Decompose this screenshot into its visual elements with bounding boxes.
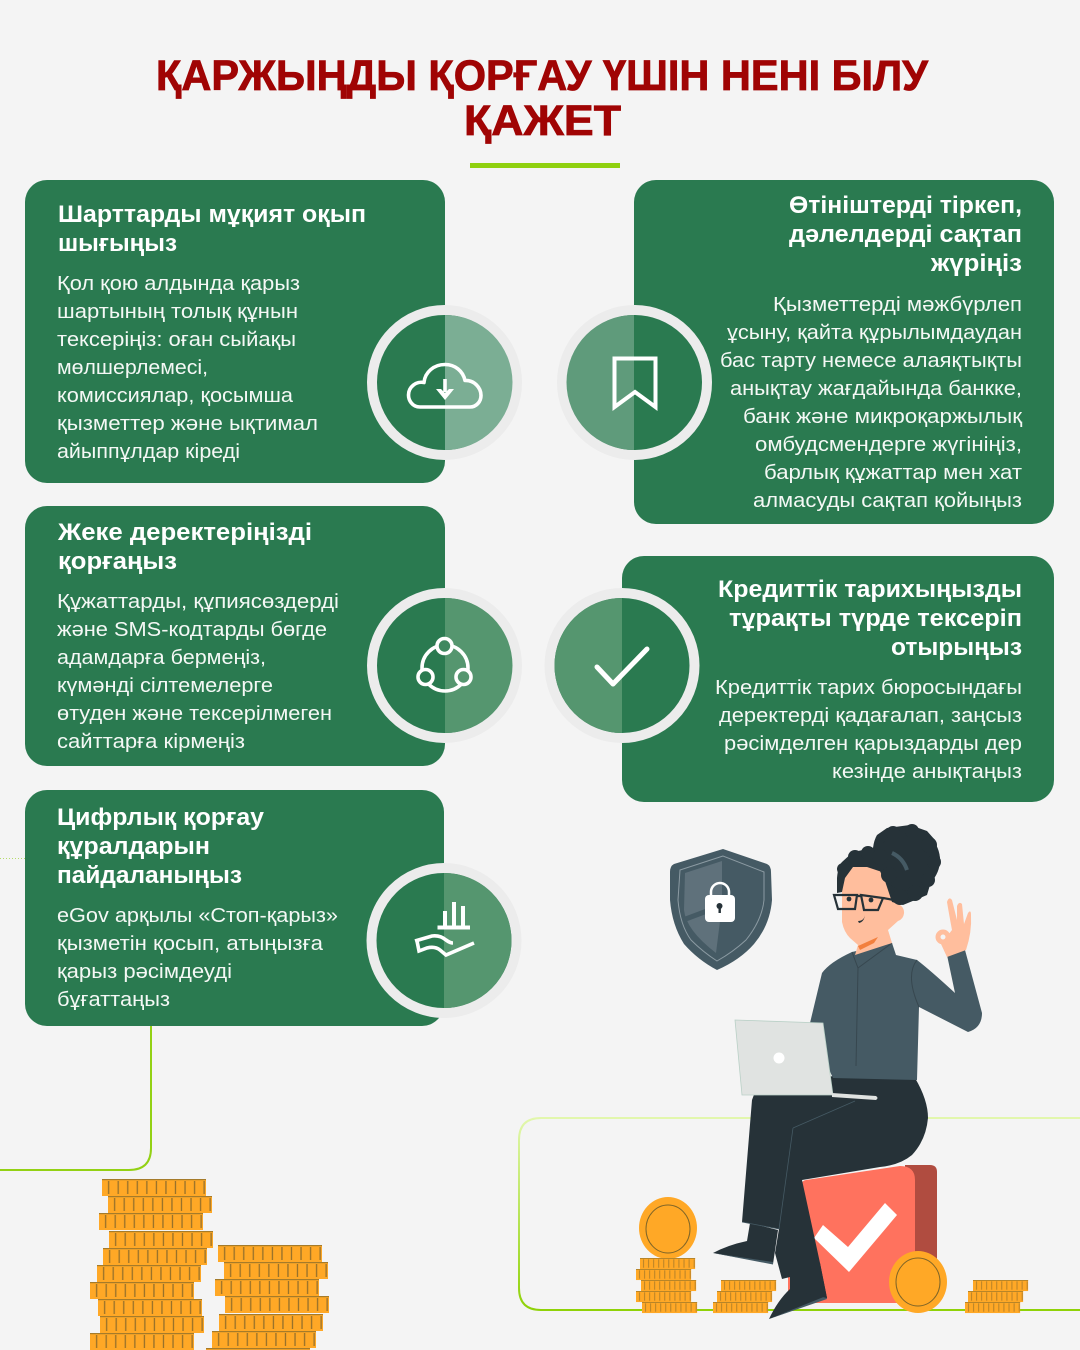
woman with laptop: [713, 824, 982, 1319]
shield with padlock: [670, 849, 772, 970]
body text: digital protection tools: [57, 905, 338, 1011]
body text: read the terms: шартының толық құнын: [57, 301, 298, 323]
eyes: [847, 897, 873, 902]
heading: read the terms: шығыңыз: [58, 230, 177, 257]
body text: protect personal data: сайттарға кірмеңіз: [57, 731, 245, 753]
glasses: [834, 895, 894, 910]
body text: read the terms: тексеріңіз: оған сыйақы: [57, 329, 296, 351]
body text: protect personal data: [57, 591, 339, 753]
body text: keep evidence: анықтау жағдайында банкке,: [730, 378, 1022, 400]
body text: keep evidence: барлық құжаттар мен хат: [764, 462, 1022, 484]
coin stack: left short: [206, 1245, 329, 1350]
body text: protect personal data: және SMS-кодтарды бөгде: [57, 619, 327, 641]
heading: digital protection tools: Цифрлық қорғау: [57, 804, 265, 831]
title: [156, 52, 929, 145]
red box with check mark: [788, 1165, 937, 1303]
icon badge: check mark: [550, 593, 694, 738]
body text: keep evidence: Қызметтерді мәжбүрлеп: [773, 294, 1022, 316]
heading: digital protection tools: [57, 804, 265, 889]
heading: read the terms: Шарттарды мұқият оқып: [58, 201, 366, 228]
icon badge: cloud download: [372, 310, 517, 455]
frame line: right: [519, 1118, 1080, 1310]
body text: check credit history: рәсімделген қарыздарды дер: [724, 733, 1022, 755]
coin stack: small B: [713, 1280, 776, 1313]
body text: keep evidence: [720, 294, 1022, 512]
title: ҚАРЖЫҢДЫ ҚОРҒАУ ҮШІН НЕНІ БІЛУ: [156, 52, 929, 100]
body text: keep evidence: омбудсмендерге жүгініңіз,: [755, 434, 1022, 456]
body text: protect personal data: Құжаттарды, құпиясөздерді: [57, 591, 339, 613]
heading: protect personal data: [57, 519, 312, 575]
curly hair: [837, 824, 941, 905]
hand ok sign: [938, 898, 971, 957]
body text: check credit history: Кредиттік тарих бюросындағы: [715, 677, 1022, 699]
shoes: [713, 1223, 827, 1319]
body text: protect personal data: күмәнді сілтемелерге: [57, 675, 273, 697]
body text: keep evidence: алмасуды сақтап қойыңыз: [753, 490, 1022, 512]
body text: read the terms: мөлшерлемесі,: [57, 357, 208, 379]
panel: check credit history: [550, 556, 1054, 802]
laptop: [735, 1020, 878, 1100]
body text: read the terms: Қол қою алдында қарыз: [57, 273, 300, 295]
body text: check credit history: кезінде анықтаңыз: [832, 761, 1022, 783]
connector line: left: [0, 1026, 151, 1170]
panel: protect personal data: [25, 506, 517, 766]
coin: large right: [889, 1251, 947, 1313]
heading: keep evidence: Өтініштерді тіркеп,: [789, 192, 1022, 219]
heading: keep evidence: жүріңіз: [930, 250, 1022, 277]
heading: digital protection tools: пайдаланыңыз: [57, 862, 242, 889]
mouth: [858, 915, 865, 923]
coin stack: small C: [965, 1280, 1028, 1313]
body text: read the terms: [57, 273, 318, 463]
panel: keep evidence: [562, 180, 1054, 524]
icon badge: network: [372, 593, 517, 738]
body text: read the terms: айыппұлдар кіреді: [57, 441, 240, 463]
icon badge: bookmark: [562, 310, 707, 455]
heading: digital protection tools: құралдарын: [57, 833, 210, 860]
body text: keep evidence: ұсыну, қайта құрылымдаудан: [727, 322, 1022, 344]
body text: keep evidence: банк және микроқаржылық: [743, 406, 1022, 428]
body text: check credit history: [715, 677, 1022, 783]
body text: keep evidence: бас тарту немесе алаяқтықты: [720, 350, 1022, 372]
neck and face: [842, 865, 904, 955]
icon badge: hand with chart: [372, 868, 516, 1013]
shirt: [810, 943, 982, 1080]
title underline: [470, 163, 620, 168]
body text: protect personal data: адамдарға бермеңіз,: [57, 647, 266, 669]
heading: check credit history: [718, 576, 1022, 661]
body text: digital protection tools: бұғаттаңыз: [57, 989, 170, 1011]
body text: read the terms: комиссиялар, қосымша: [57, 385, 294, 407]
body text: read the terms: қызметтер және ықтимал: [57, 413, 318, 435]
body text: protect personal data: өтуден және тексерілмеген: [57, 703, 332, 725]
coin: large left: [639, 1197, 697, 1259]
heading: read the terms: [58, 201, 366, 257]
trousers: [742, 1076, 928, 1298]
panel: read the terms: [25, 180, 517, 483]
coin stack: left tall: [90, 1179, 213, 1350]
heading: check credit history: тұрақты түрде тексеріп: [729, 605, 1022, 632]
heading: protect personal data: Жеке деректеріңізді: [57, 519, 312, 546]
body text: check credit history: деректерді қадағалап, заңсыз: [719, 705, 1022, 727]
heading: protect personal data: қорғаңыз: [58, 548, 177, 575]
body text: digital protection tools: қызметін қосып, атыңызға: [57, 933, 324, 955]
coin stack: small A: [636, 1258, 697, 1313]
heading: check credit history: отырыңыз: [891, 634, 1022, 661]
body text: digital protection tools: қарыз рәсімдеуді: [57, 961, 232, 983]
heading: keep evidence: [789, 192, 1022, 277]
body text: digital protection tools: eGov арқылы «Стоп-қарыз»: [57, 905, 338, 927]
heading: keep evidence: дәлелдерді сақтап: [789, 221, 1022, 248]
title: ҚАЖЕТ: [464, 97, 621, 145]
panel: digital protection tools: [25, 790, 516, 1026]
heading: check credit history: Кредиттік тарихыңызды: [718, 576, 1022, 603]
